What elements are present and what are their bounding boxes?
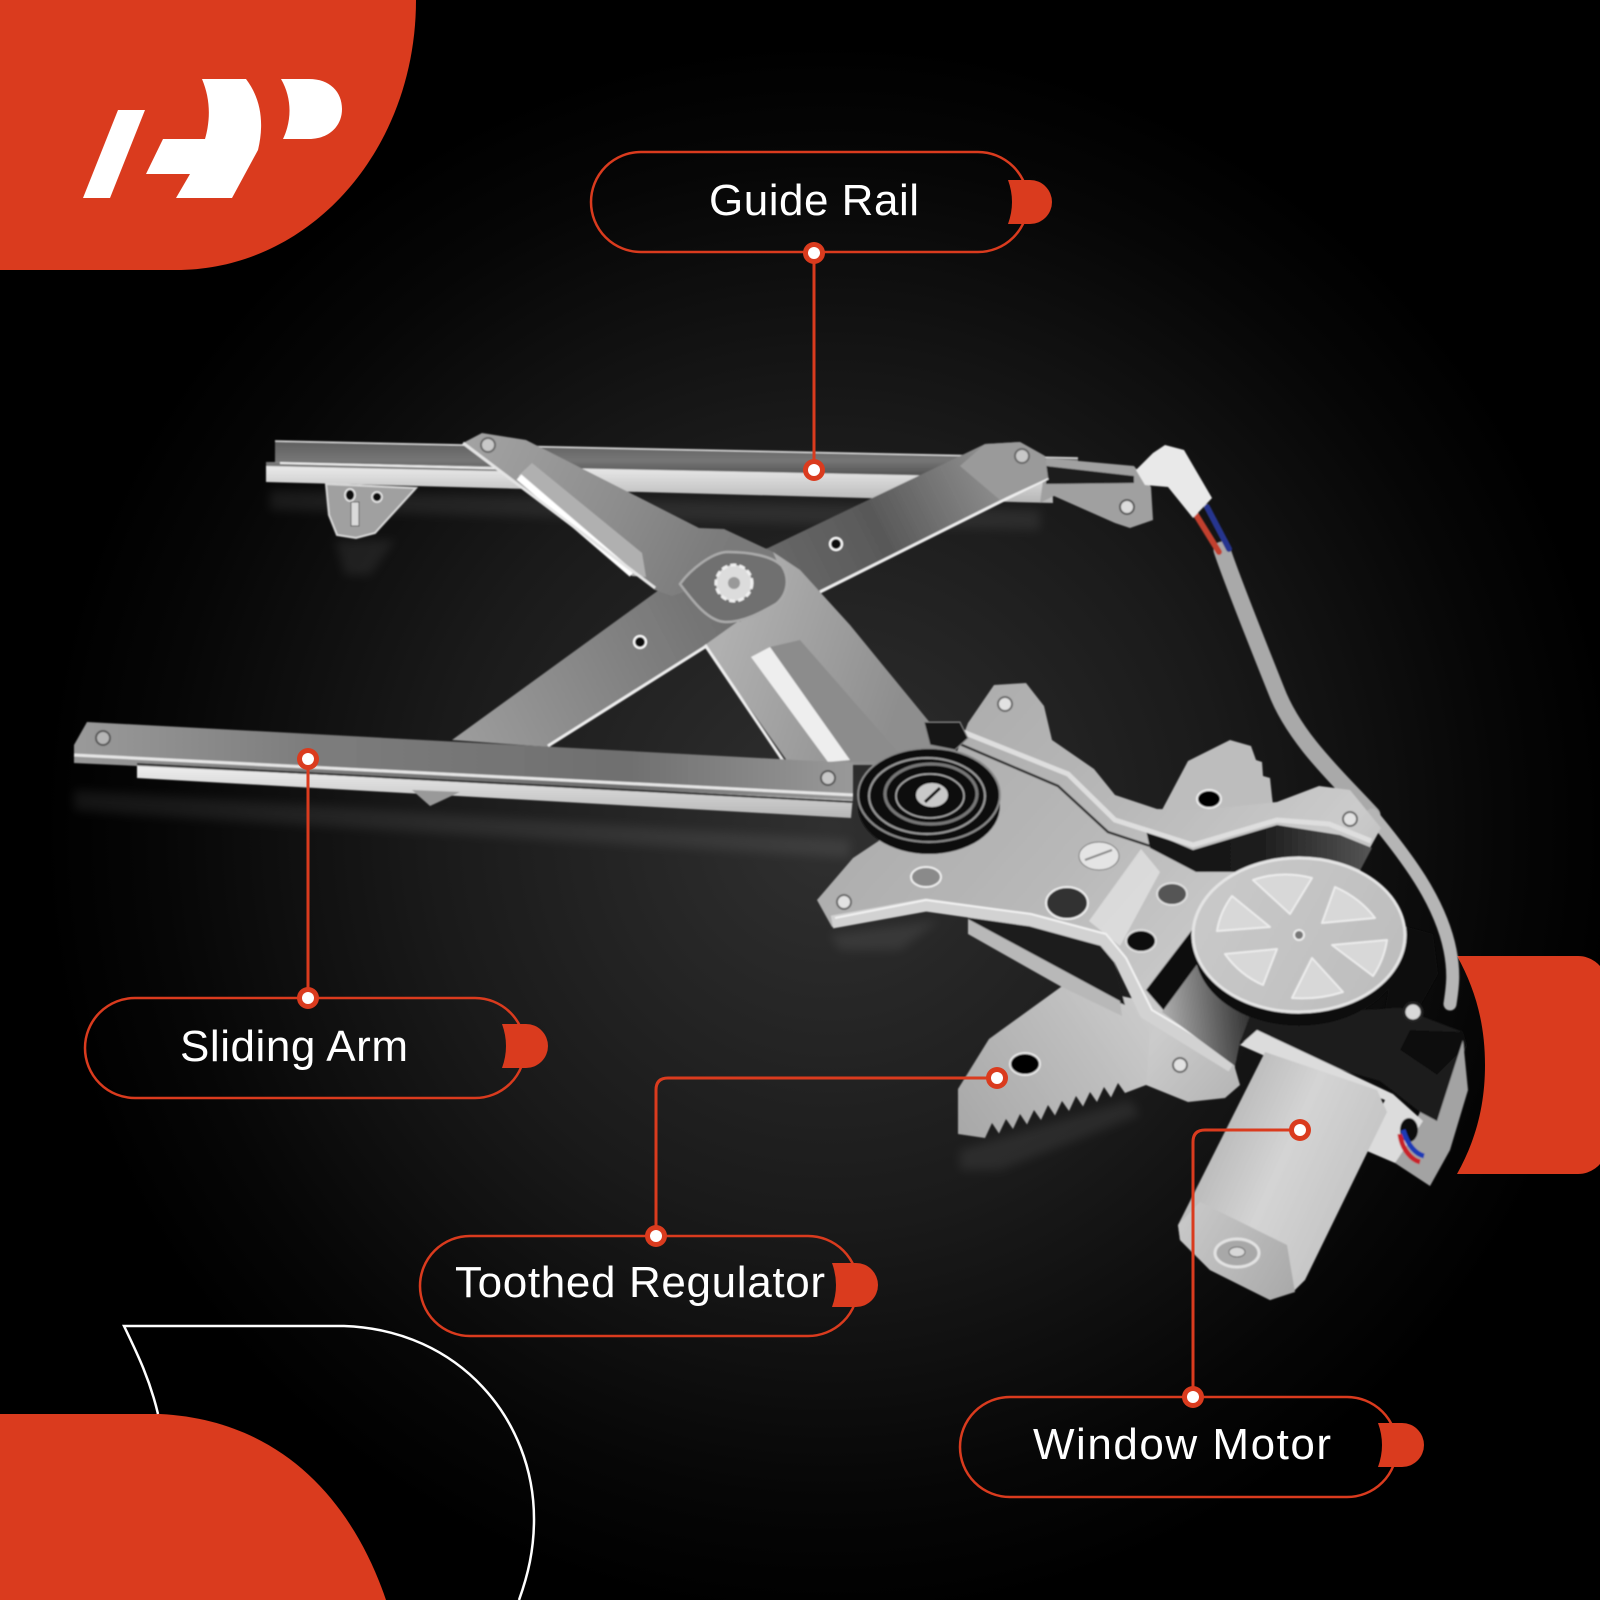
- gear cover disc: [1193, 858, 1405, 1026]
- cap: [1378, 1423, 1424, 1467]
- motor can: [1178, 1052, 1387, 1300]
- white outline shape: [124, 1326, 534, 1600]
- scissor arm: lower left to upper right: [452, 442, 1048, 747]
- label text: Toothed Regulator: [455, 1258, 825, 1307]
- sliding arm rail: [74, 722, 853, 818]
- corner shape: top left orange: [0, 0, 416, 270]
- centre hub rivet: [680, 552, 787, 622]
- corner shape: right orange: [1457, 956, 1600, 1174]
- motor base under disc: [1146, 930, 1215, 1012]
- cap: [832, 1263, 878, 1307]
- black gearbox housing: [1240, 925, 1467, 1121]
- floor reflections: [74, 490, 1140, 1170]
- lower toothed sector: [958, 984, 1180, 1138]
- leader dots: [297, 748, 319, 1009]
- corner shape: bottom left orange: [0, 1414, 386, 1600]
- leader line: [306, 759, 310, 998]
- callout: Window Motor: [960, 1119, 1424, 1497]
- scissor arm: upper left to motor plate: [463, 433, 958, 765]
- leader line: [812, 253, 816, 470]
- motor end bracket and wires: [1240, 1030, 1468, 1186]
- spiral spring: [858, 748, 1000, 854]
- pill outline: [420, 1236, 858, 1336]
- pill outline: [85, 998, 525, 1098]
- leader line: [1193, 1130, 1300, 1397]
- product: window regulator assembly: [74, 433, 1468, 1300]
- upper guide rail: [266, 441, 1078, 503]
- callout: Sliding Arm: [85, 748, 548, 1098]
- rail end bracket: [1040, 458, 1153, 528]
- black latch: [924, 722, 968, 750]
- upper toothed sector: [1162, 740, 1275, 830]
- label text: Guide Rail: [709, 176, 919, 225]
- label text: Window Motor: [1033, 1420, 1331, 1469]
- wiring connector: [1136, 445, 1212, 518]
- plate bright fold: [1089, 849, 1160, 946]
- pill outline: [960, 1397, 1397, 1497]
- power cable: [1193, 507, 1453, 1004]
- leader line: [656, 1078, 995, 1236]
- mounting plate: [817, 683, 1381, 1102]
- leader dots: [803, 242, 825, 481]
- leader dots: [1182, 1119, 1311, 1408]
- cap: [502, 1024, 548, 1068]
- lower plate strap: [832, 905, 1232, 1066]
- cap: [1008, 180, 1052, 224]
- logo: [83, 79, 342, 198]
- small rail bracket: [326, 484, 416, 538]
- plate holes: [1079, 842, 1119, 870]
- plate dark ridge: [1146, 825, 1372, 880]
- label text: Sliding Arm: [180, 1022, 408, 1071]
- pill outline: [591, 152, 1028, 252]
- callout: Guide Rail: [591, 152, 1052, 481]
- plate screws: [998, 697, 1012, 711]
- callout: Toothed Regulator: [420, 1067, 1008, 1336]
- leader dots: [645, 1067, 1008, 1247]
